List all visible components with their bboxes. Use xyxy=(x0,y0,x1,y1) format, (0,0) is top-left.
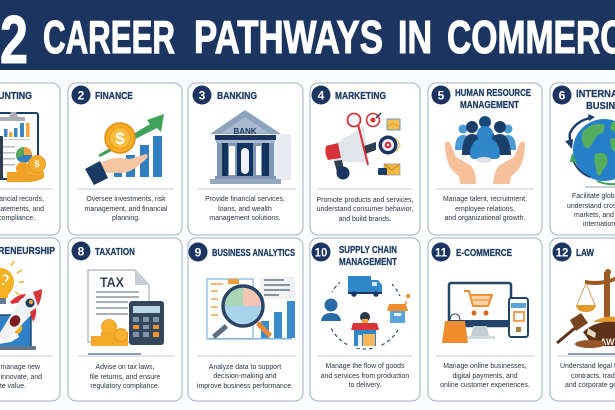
icon: tax form, calculator and coins: TAX xyxy=(100,274,125,290)
badge 10 xyxy=(312,242,330,262)
description: accounting xyxy=(0,196,44,222)
description: taxation xyxy=(90,364,160,390)
badge 6: 6 xyxy=(559,88,566,102)
description: finance xyxy=(85,196,168,222)
description: law xyxy=(560,363,615,389)
icon: people held by hands xyxy=(445,116,525,184)
heading: marketing: MARKETING xyxy=(335,91,386,102)
badge 5 xyxy=(432,86,450,104)
description: finance: Oversee investments, risk xyxy=(86,196,166,203)
panel: e-commerce xyxy=(428,238,542,401)
heading: e-commerce: E-COMMERCE xyxy=(456,248,512,259)
title: CAREER xyxy=(43,11,175,63)
description: e-commerce: digital payments, and xyxy=(452,373,518,380)
badge 2 xyxy=(72,86,90,104)
badge 8 xyxy=(72,242,90,260)
heading: international business xyxy=(576,89,615,112)
heading: business analytics: BUSINESS ANALYTICS xyxy=(212,248,295,259)
description: human resource management: and organizational growth. xyxy=(445,215,525,222)
description: marketing xyxy=(317,197,414,223)
badge 5: 5 xyxy=(438,88,445,102)
badge 12 xyxy=(552,242,572,262)
heading: human resource management xyxy=(455,88,531,111)
icon: light bulb, rocket and laptop xyxy=(0,261,42,350)
badge 11 xyxy=(432,242,450,262)
icon: hand with coin and growth chart xyxy=(85,114,164,185)
badge 9: 9 xyxy=(195,246,202,260)
description: banking: Provide financial services, xyxy=(205,196,285,203)
badge 12: 12 xyxy=(556,248,568,260)
description: international business xyxy=(567,193,615,228)
heading: supply chain management: SUPPLY CHAIN xyxy=(339,245,397,256)
description: e-commerce: online customer experiences. xyxy=(440,382,530,389)
badge 3 xyxy=(192,86,212,104)
icon: globe with arrows xyxy=(565,114,615,187)
heading: human resource management: HUMAN RESOURCE xyxy=(455,88,531,99)
description: entrepreneurship xyxy=(0,364,42,390)
description: marketing: understand consumer behavior, xyxy=(317,206,413,213)
panel: taxation xyxy=(68,238,182,401)
heading: law: LAW xyxy=(576,248,594,259)
icon: bank building xyxy=(210,110,291,184)
badge 6 xyxy=(552,86,572,104)
description: business analytics: Analyze data to support xyxy=(209,364,281,371)
description: banking: loans, and wealth xyxy=(218,206,272,213)
panel: supply chain management xyxy=(310,238,420,401)
description: taxation: file returns, and ensure xyxy=(90,374,160,381)
panel: business analytics xyxy=(188,238,303,401)
description: marketing: and build brands. xyxy=(339,216,392,223)
heading: banking: BANKING xyxy=(217,91,257,102)
panel: law xyxy=(550,238,615,401)
icon: supply chain cycle xyxy=(318,270,410,349)
heading: human resource management: MANAGEMENT xyxy=(460,100,519,111)
panel: banking xyxy=(188,83,303,235)
title: PATHWAYS xyxy=(194,11,383,63)
description: banking: management solutions. xyxy=(209,215,281,222)
description: finance: management, and financial xyxy=(85,206,168,213)
icon: megaphone with targets xyxy=(325,113,400,180)
description: supply chain management: to delivery. xyxy=(349,382,381,389)
badge 8: 8 xyxy=(78,244,85,258)
description: taxation: Advise on tax laws, xyxy=(96,364,155,371)
icon: clipboard with charts and coins xyxy=(0,112,46,182)
header banner xyxy=(0,0,615,78)
description: e-commerce: Manage online businesses, xyxy=(443,363,527,370)
description: business analytics: improve business performance. xyxy=(197,383,293,390)
icon: scales of justice and gavel: AW xyxy=(600,337,615,347)
icon: desktop, phone and shopping bag xyxy=(442,283,528,343)
title xyxy=(0,2,615,78)
heading: supply chain management xyxy=(339,245,397,268)
icon: tax form, calculator and coins xyxy=(88,270,164,346)
badge 4: 4 xyxy=(318,88,325,102)
title: IN xyxy=(398,11,432,63)
description: taxation: regulatory compliance. xyxy=(90,383,160,390)
icon: magnifier with charts xyxy=(207,277,295,340)
description: supply chain management: Manage the flow of goods xyxy=(326,363,405,370)
badge 4 xyxy=(312,86,330,104)
badge 3: 3 xyxy=(199,88,206,102)
heading: supply chain management: MANAGEMENT xyxy=(339,257,397,268)
badge 9 xyxy=(188,242,208,262)
description: human resource management: Manage talent, recruitment, xyxy=(443,196,527,203)
description: banking xyxy=(205,196,285,222)
panel: human resource management xyxy=(428,83,542,235)
description: supply chain management: and services from production xyxy=(321,373,409,380)
icon: scales of justice and gavel xyxy=(557,269,615,348)
panel: accounting xyxy=(0,83,60,235)
panel: finance xyxy=(68,83,182,235)
icon: bank building: BANK xyxy=(233,127,257,136)
icon: hand with coin and growth chart: $ xyxy=(115,129,125,148)
icon: clipboard with charts and coins: $ xyxy=(34,159,40,169)
panel: marketing xyxy=(310,83,420,235)
description: business analytics: decision-making and xyxy=(213,373,277,380)
description: human resource management: employee relations, xyxy=(455,206,515,213)
description: marketing: Promote products and services, xyxy=(317,197,414,204)
description: e-commerce xyxy=(440,363,530,389)
description: business analytics xyxy=(197,364,293,390)
badge 11: 11 xyxy=(435,248,448,260)
badge 10: 10 xyxy=(315,248,327,260)
description: supply chain management xyxy=(321,363,409,389)
badge 2: 2 xyxy=(78,88,85,102)
heading: taxation: TAXATION xyxy=(95,247,135,258)
description: finance: planning. xyxy=(112,215,140,222)
panel: entrepreneurship xyxy=(0,238,60,401)
description: human resource management xyxy=(443,196,527,222)
panel: international business xyxy=(550,83,615,235)
heading: finance: FINANCE xyxy=(95,91,133,102)
